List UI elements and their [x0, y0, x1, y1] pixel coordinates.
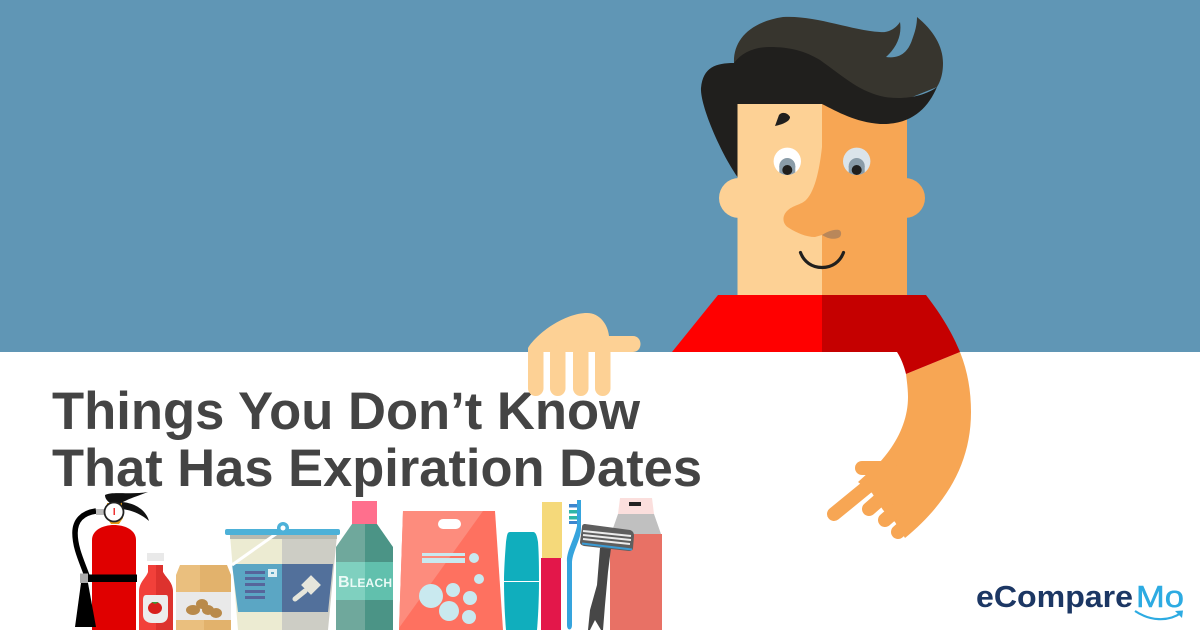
title: That Has Expiration Dates [52, 439, 702, 498]
icon: tube bottle [610, 498, 662, 630]
icon: detergent bag [399, 511, 503, 630]
ears [719, 178, 925, 218]
title: Things You Don’t Know [52, 382, 641, 441]
character hand [528, 313, 640, 396]
icon: fire extinguisher [75, 492, 149, 630]
title [52, 382, 702, 498]
face [738, 100, 907, 296]
nostril [822, 230, 841, 239]
logo: eCompareMo: eCompare [976, 579, 1133, 614]
icon: lipstick tube [541, 502, 562, 630]
mouth [800, 252, 844, 268]
shirt [672, 295, 960, 374]
character: man [672, 17, 971, 538]
arm [834, 352, 971, 538]
icon: bleach bottle [336, 501, 393, 630]
front hair [701, 47, 937, 177]
icon: razor [580, 524, 634, 630]
right eye [843, 148, 870, 175]
left eye [774, 148, 801, 175]
icon: paint bucket [225, 522, 340, 630]
icon: bleach bottle: BLEACH [338, 574, 392, 591]
logo: eCompareMo: Mo [1136, 579, 1184, 614]
eyebrow [775, 113, 790, 126]
panel: blue background [0, 0, 1200, 352]
logo: eCompareMo [976, 579, 1184, 619]
icon: teal bottle [504, 532, 539, 630]
icon: toothbrush [567, 500, 581, 630]
icon: ketchup bottle [139, 553, 173, 630]
icon: peanut butter jar [176, 565, 231, 630]
back hair [734, 17, 943, 110]
